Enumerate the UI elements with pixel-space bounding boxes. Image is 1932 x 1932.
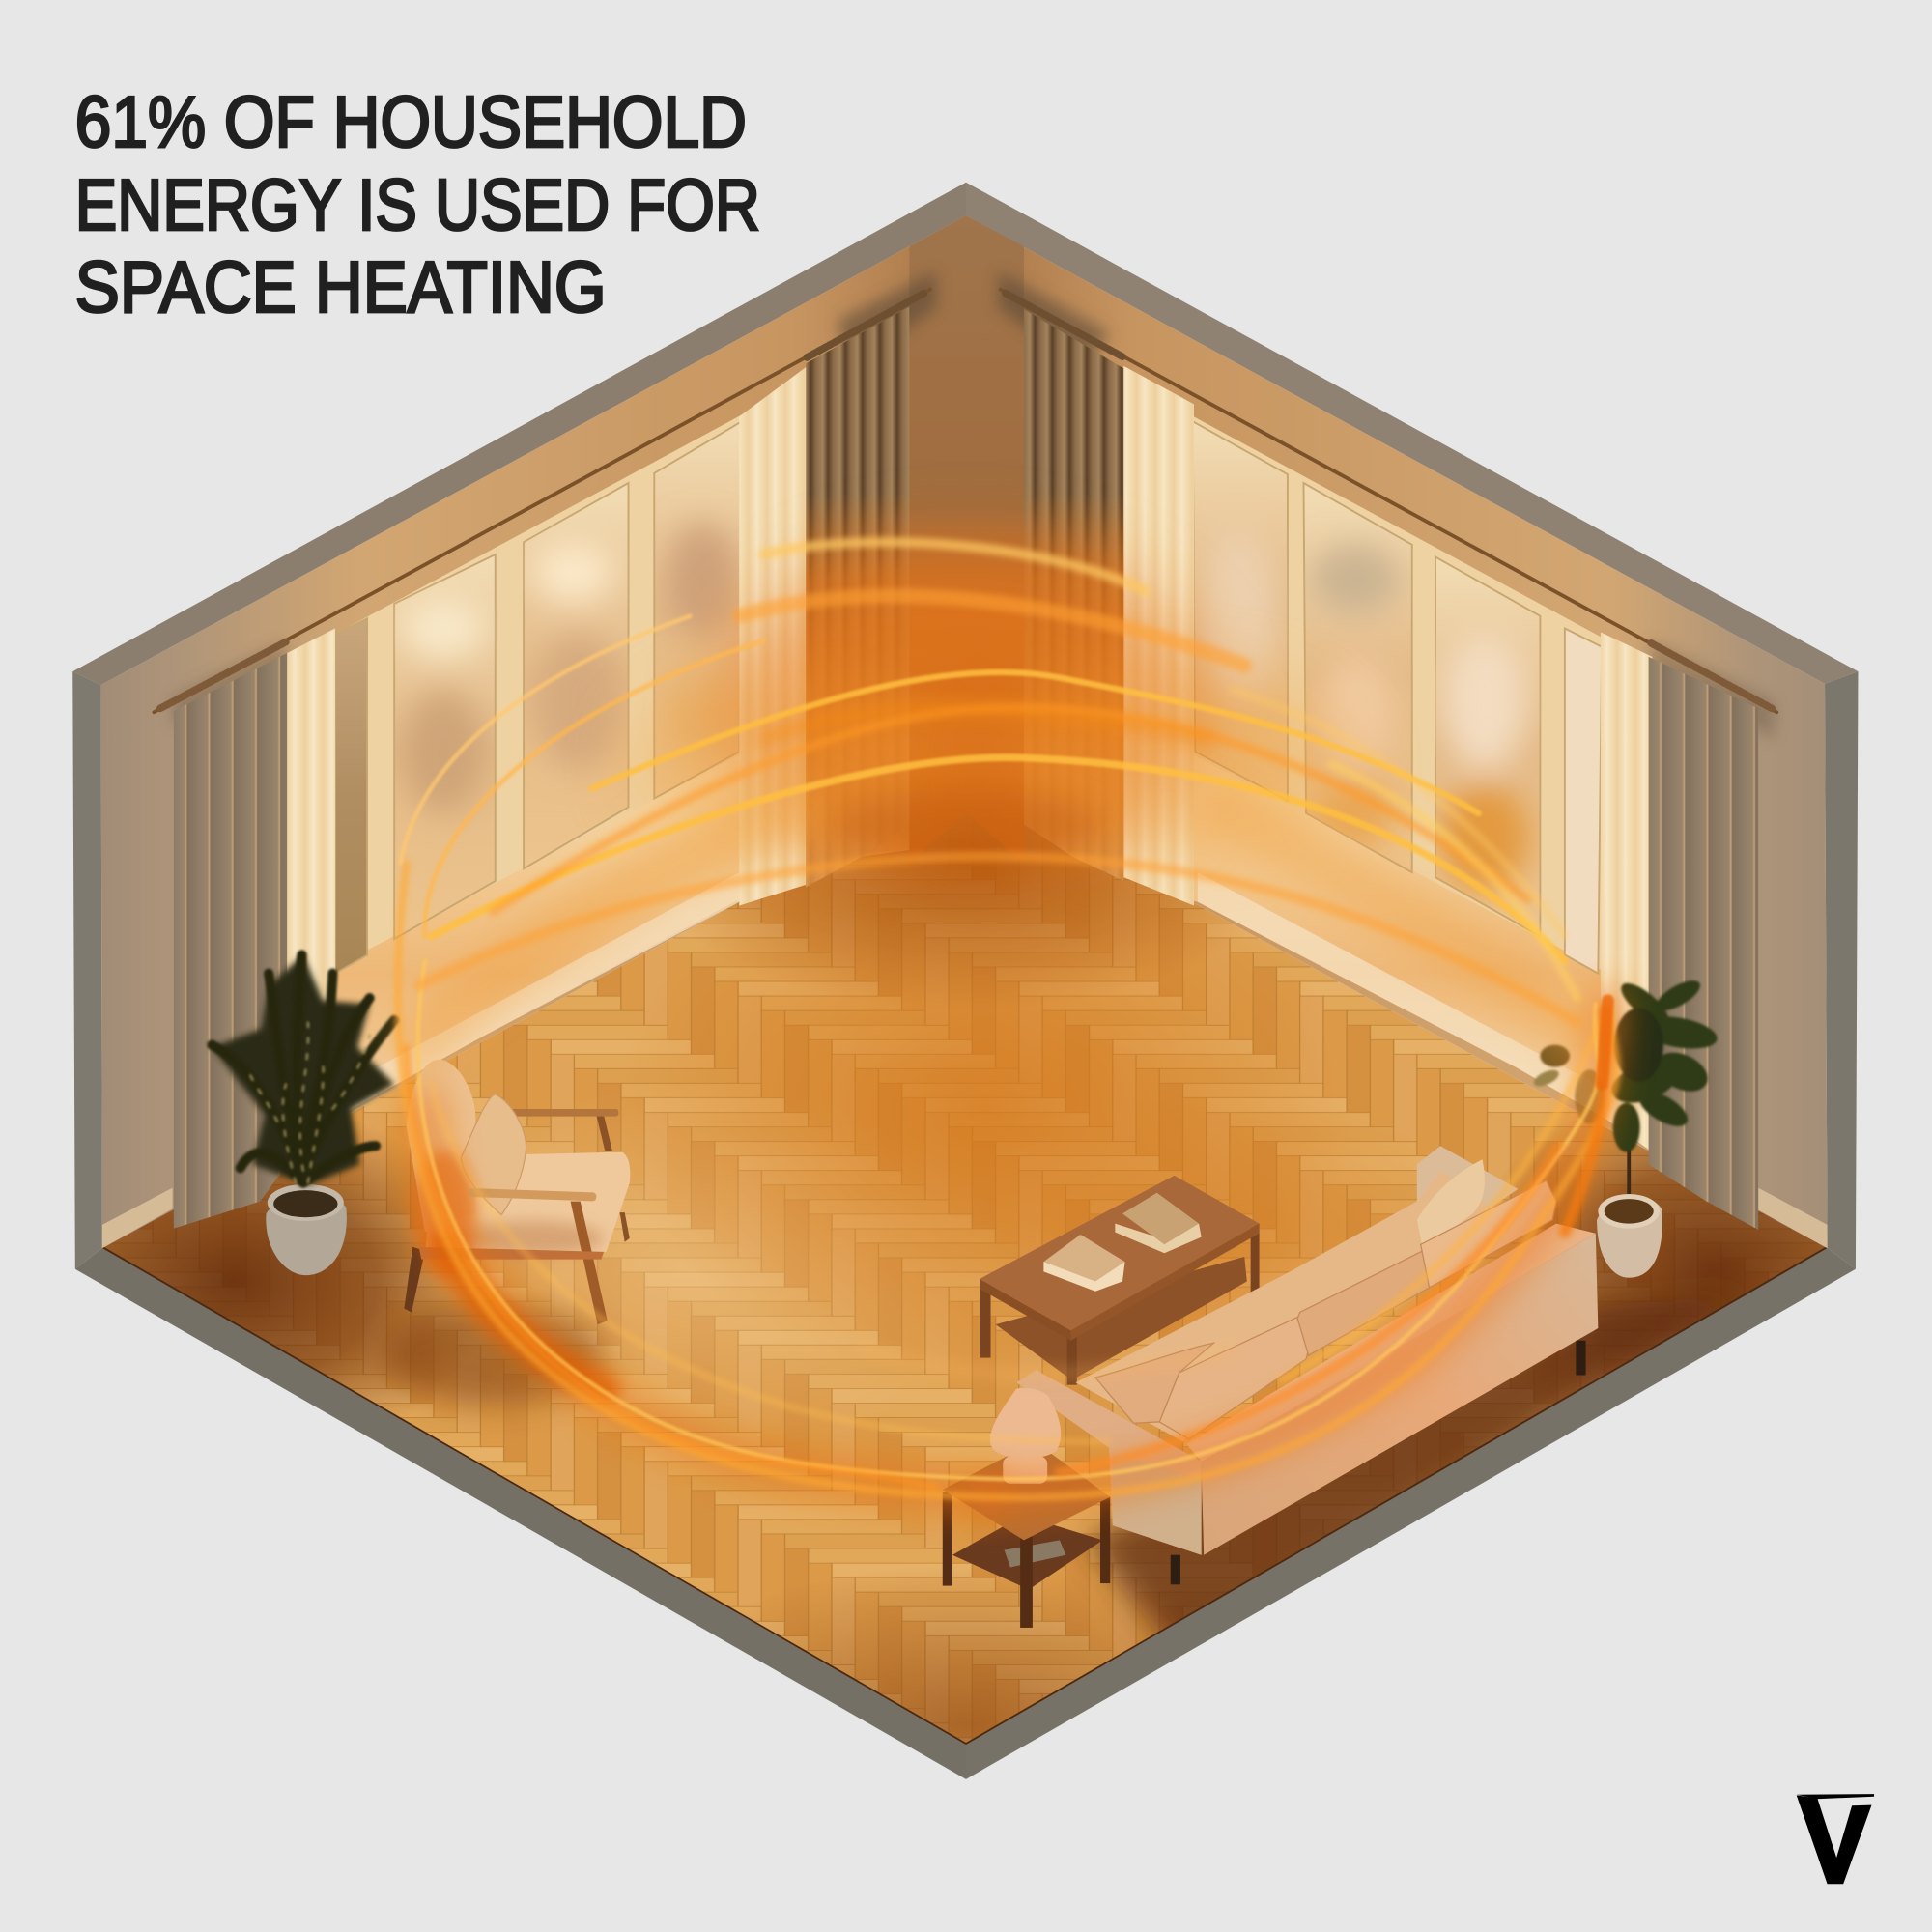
far leg and far arm xyxy=(506,1109,630,1242)
curtain rods xyxy=(154,290,1776,712)
heat swirl: flame ribbons xyxy=(398,542,1617,1497)
seat xyxy=(425,1152,630,1254)
stem xyxy=(1628,1115,1631,1202)
room cutaway illustration xyxy=(72,182,1859,1779)
skirting ends xyxy=(102,1188,173,1248)
near pillow xyxy=(1095,1343,1213,1423)
upper arcs xyxy=(401,542,1577,1023)
curtains: far left xyxy=(174,629,335,1229)
title xyxy=(75,81,760,327)
table top xyxy=(980,1176,1260,1331)
right windows xyxy=(1186,412,1608,1120)
leaves xyxy=(1531,975,1719,1152)
left potted palm xyxy=(212,955,394,1275)
title: 61% OF HOUSEHOLD xyxy=(75,81,747,162)
near arm and legs xyxy=(404,1188,608,1324)
title: ENERGY IS USED FOR xyxy=(75,164,760,245)
near arm end xyxy=(1016,1370,1202,1555)
far pillow xyxy=(1417,1159,1485,1251)
curtains: far right xyxy=(1601,632,1758,1230)
right potted fiddle-leaf plant xyxy=(1531,975,1719,1278)
side table with lamp xyxy=(943,1388,1110,1628)
curtains: centre left xyxy=(739,307,909,906)
corner column xyxy=(909,215,1024,863)
sofa xyxy=(1016,1146,1598,1584)
title: SPACE HEATING xyxy=(75,246,607,327)
lower band xyxy=(398,863,1617,1497)
pot xyxy=(1597,1194,1662,1278)
fronds xyxy=(212,955,394,1185)
table top xyxy=(943,1441,1110,1540)
icon: V logo xyxy=(1797,1794,1874,1884)
lamp xyxy=(990,1388,1061,1484)
legs xyxy=(980,1224,1260,1385)
right rod xyxy=(1001,290,1776,712)
back walls xyxy=(101,215,1828,1248)
book stack 2 xyxy=(1115,1193,1202,1253)
outer wall frame xyxy=(72,183,1858,1779)
pot xyxy=(266,1184,347,1275)
backrest xyxy=(407,1060,475,1233)
left windows xyxy=(323,412,746,1125)
armchair xyxy=(404,1060,630,1324)
book stack 1 xyxy=(1043,1235,1125,1292)
blurred view outside windows xyxy=(402,523,1529,892)
back top xyxy=(1186,1224,1596,1462)
back cushions xyxy=(1159,1180,1556,1439)
legs xyxy=(943,1492,1110,1628)
curtains: centre right xyxy=(1024,309,1194,906)
shelf and books xyxy=(952,1516,1103,1589)
shaded seat underside xyxy=(456,1221,604,1256)
orange glow on backrest xyxy=(412,1150,475,1278)
lower shelf xyxy=(996,1257,1247,1380)
far arm xyxy=(1417,1146,1518,1233)
seat xyxy=(1076,1171,1497,1441)
back face xyxy=(1202,1234,1598,1555)
pillow xyxy=(461,1094,526,1215)
floor: herringbone parquet xyxy=(102,813,1828,1745)
coffee table xyxy=(980,1176,1260,1385)
sofa legs xyxy=(1171,1341,1586,1584)
left rod xyxy=(154,290,930,712)
heat swirl: warm haze xyxy=(407,493,1602,1060)
